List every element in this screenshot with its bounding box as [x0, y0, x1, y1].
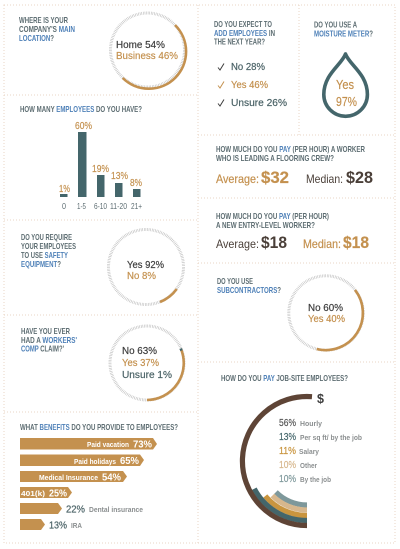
heading: moisture meter: MOISTURE METER?	[314, 28, 373, 38]
legend: salary: Salary	[299, 449, 319, 456]
legend: per sq ft: Per sq ft/ by the job	[300, 435, 362, 442]
heading: subcontractors: SUBCONTRACTORS?	[217, 285, 281, 295]
panel: subcontractors	[217, 276, 363, 350]
bar: dental insurance: Dental insurance	[89, 507, 143, 514]
donut chart: safety equipment: No 8%	[127, 270, 156, 282]
bar: paid vacation: 73%	[133, 438, 153, 450]
heading: crew leader pay: HOW MUCH DO YOU PAY (PER HOUR) A WORKER	[216, 144, 365, 154]
stat: median $18: $18	[343, 233, 369, 252]
bar: medical insurance: Medical Insurance	[39, 473, 98, 482]
radial chart: pay types	[242, 397, 312, 526]
heading: add employees: DO YOU EXPECT TO	[214, 19, 272, 29]
bar chart: employees: 8%	[130, 177, 142, 189]
donut chart: subcontractors: No 60%	[308, 302, 343, 314]
legend: by the job: 10%	[279, 473, 296, 485]
bar chart: employees: 1%	[59, 183, 70, 195]
panel: add employees	[214, 19, 287, 109]
stat: median $18: Median:	[303, 237, 341, 251]
bar: paid holidays: Paid holidays	[74, 457, 116, 466]
heading: workers comp: HAVE YOU EVER	[21, 326, 70, 336]
bar: medical insurance	[20, 471, 127, 484]
heading: main location: LOCATION?	[19, 33, 54, 43]
heading: subcontractors: DO YOU USE	[217, 276, 253, 286]
donut chart: safety equipment: Yes 92%	[127, 259, 164, 271]
panel: workers comp claim	[21, 326, 184, 400]
heading: add employees: THE NEXT YEAR?	[214, 36, 265, 46]
heading: safety equipment	[21, 232, 76, 269]
legend: salary: 11%	[279, 445, 296, 457]
heading: main location: COMPANY'S MAIN	[19, 24, 75, 34]
heading: entry-level pay: A NEW ENTRY-LEVEL WORKER?	[216, 220, 315, 230]
heading: main location	[19, 15, 75, 43]
donut chart: subcontractors	[289, 276, 363, 350]
donut chart: workers comp: Yes 37%	[122, 357, 159, 369]
heading: benefits: WHAT BENEFITS DO YOU PROVIDE TO EMPLOYEES?	[20, 422, 178, 432]
panel: crew leader pay	[216, 144, 373, 187]
value: yes 97%: 97%	[336, 94, 357, 109]
legend: by the job	[279, 473, 331, 485]
heading: crew leader pay	[216, 144, 365, 163]
bar: 401(k): 401(k)	[21, 489, 46, 498]
legend: by the job: By the job	[300, 477, 331, 484]
stat: average $18	[216, 233, 287, 252]
bar: IRA	[20, 519, 82, 532]
checklist: unsure: Unsure 26%	[231, 97, 287, 109]
bar: IRA: 13%	[49, 520, 67, 532]
bar: dental insurance: 22%	[66, 504, 85, 516]
heading: safety equipment: YOUR EMPLOYEES	[21, 241, 76, 251]
heading: job-site pay: HOW DO YOU PAY JOB-SITE EMPLOYEES?	[221, 373, 348, 383]
bar: paid holidays: 65%	[120, 455, 140, 467]
heading: add employees	[214, 19, 275, 46]
heading: moisture meter	[314, 20, 373, 38]
legend: other	[279, 459, 317, 471]
donut chart: workers comp: No 63%	[122, 345, 157, 357]
panel: safety equipment	[21, 230, 184, 304]
stat: average $32: $32	[261, 168, 289, 187]
panel: entry-level pay	[216, 211, 369, 252]
panel: number of employees	[20, 104, 142, 211]
bar chart: employees: 11-20	[110, 202, 127, 211]
donut chart: home vs business: Business 46%	[116, 50, 178, 62]
donut chart: home vs business	[110, 13, 186, 89]
legend: per sq ft: 13%	[279, 431, 296, 443]
stat: average $18: Average:	[216, 237, 259, 251]
heading: workers comp	[21, 326, 77, 354]
icon: dollar sign: $	[317, 392, 324, 406]
legend: salary	[279, 445, 319, 457]
icon: water drop	[324, 54, 367, 116]
heading: add employees: ADD EMPLOYEES IN	[214, 28, 275, 38]
heading: moisture meter: DO YOU USE A	[314, 20, 357, 30]
bar: 401(k)	[20, 487, 72, 500]
panel: benefits	[20, 422, 178, 532]
donut chart: safety equipment	[108, 230, 184, 304]
bar chart: employees: 6-10	[94, 202, 107, 211]
heading: number of employees: HOW MANY EMPLOYEES DO YOU HAVE?	[20, 104, 142, 114]
stat: average $32	[216, 168, 289, 187]
bar: 401(k): 25%	[49, 488, 68, 500]
heading: entry-level pay: HOW MUCH DO YOU PAY (PER HOUR)	[216, 211, 329, 221]
bar: IRA: IRA	[71, 523, 82, 530]
heading: safety equipment: EQUIPMENT?	[21, 259, 61, 269]
donut chart: home vs business: Home 54%	[116, 39, 165, 51]
stat: median $28	[306, 168, 373, 187]
bar: dental insurance	[20, 503, 143, 516]
panel: moisture meter	[314, 20, 373, 116]
heading: workers comp: COMP CLAIM?'	[21, 344, 64, 354]
bar: medical insurance: 54%	[102, 472, 122, 484]
bar chart: employees: 0	[62, 202, 66, 211]
bar chart: employees	[59, 120, 142, 211]
bar chart: employees: 21+	[131, 202, 142, 211]
heading: subcontractors	[217, 276, 281, 295]
heading: entry-level pay	[216, 211, 329, 230]
heading: main location: WHERE IS YOUR	[19, 15, 68, 25]
legend: per sq ft	[279, 431, 362, 443]
donut chart: workers comp	[110, 326, 184, 400]
stat: median $18	[303, 233, 369, 252]
panel: main location	[19, 13, 186, 89]
heading: crew leader pay: WHO IS LEADING A FLOORING CREW?	[216, 153, 334, 163]
bar chart: employees: 13%	[111, 170, 128, 182]
stat: average $18: $18	[261, 233, 287, 252]
checklist: no: No 28%	[231, 61, 265, 73]
bar: paid holidays	[20, 454, 144, 467]
panel: job-site pay	[221, 373, 362, 526]
bar chart: employees: 19%	[92, 163, 109, 175]
bar chart: employees: 60%	[75, 120, 92, 132]
value: yes 97%	[336, 77, 357, 109]
legend: other: Other	[300, 463, 317, 470]
legend: hourly	[279, 417, 322, 429]
value: yes 97%: Yes	[336, 77, 354, 92]
legend: hourly: 56%	[279, 417, 296, 429]
heading: safety equipment: DO YOU REQUIRE	[21, 232, 72, 242]
bar: paid vacation	[20, 438, 157, 450]
stat: average $32: Average:	[216, 172, 259, 186]
heading: safety equipment: TO USE SAFETY	[21, 250, 68, 260]
stat: median $28: $28	[346, 168, 373, 187]
heading: workers comp: HAD A WORKERS'	[21, 335, 77, 345]
donut chart: workers comp: Unsure 1%	[122, 369, 172, 381]
stat: median $28: Median:	[306, 172, 343, 186]
bar: paid vacation: Paid vacation	[87, 440, 129, 449]
donut chart: subcontractors: Yes 40%	[308, 313, 345, 325]
legend: other: 10%	[279, 459, 296, 471]
checklist: yes: Yes 46%	[231, 79, 268, 91]
bar chart: employees: 1-5	[77, 202, 86, 211]
legend: hourly: Hourly	[300, 421, 322, 428]
